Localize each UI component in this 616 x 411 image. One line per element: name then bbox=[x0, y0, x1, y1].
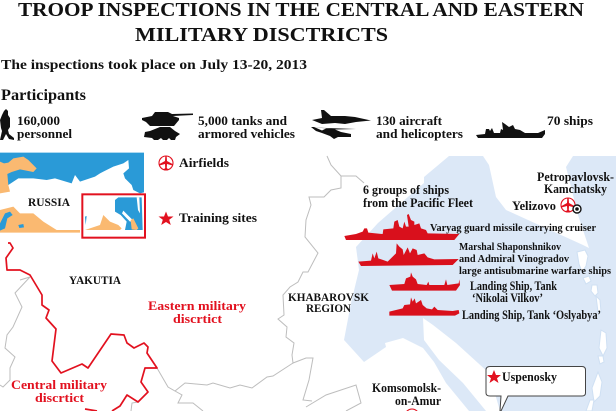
text: ships: 70 ships bbox=[547, 114, 593, 128]
label: Komsomolsk-on-Amur bbox=[372, 381, 441, 408]
text: aircraft: and helicopters bbox=[376, 127, 463, 141]
label: eastern military district bbox=[148, 299, 247, 326]
ship: Shaposhnikov and Vinogradov bbox=[358, 243, 459, 266]
label: Khabarovsk region: KHABAROVSK bbox=[288, 292, 369, 304]
ship: Nikolai Vilkov bbox=[389, 272, 460, 291]
icon: city marker bbox=[573, 205, 581, 213]
text: Shaposhnikov and Vinogradov: and Admiral Vinogradov bbox=[459, 253, 569, 265]
red district boundary bbox=[6, 243, 157, 411]
text: callout label: Uspenosky bbox=[502, 369, 557, 384]
label: Khabarovsk region: REGION bbox=[306, 303, 352, 315]
label: central military district: discrtict bbox=[35, 391, 85, 405]
text: aircraft bbox=[376, 114, 463, 141]
text: aircraft: 130 aircraft bbox=[376, 114, 443, 128]
label: Khabarovsk region bbox=[288, 292, 369, 315]
ship: Oslyabya bbox=[389, 297, 459, 316]
text: six groups of ships bbox=[363, 183, 474, 210]
text: six groups of ships: from the Pacific Fleet bbox=[363, 196, 474, 210]
text: tanks: 5,000 tanks and bbox=[198, 114, 287, 128]
label: central military district bbox=[11, 378, 108, 405]
label: Yakutia: YAKUTIA bbox=[69, 275, 122, 287]
subtitle: The inspections took place on July 13-20, 2013 bbox=[1, 58, 307, 73]
ship: Varyag bbox=[344, 214, 459, 240]
label: eastern military district: Eastern military bbox=[148, 299, 247, 313]
icon: tank and armored vehicle bbox=[142, 112, 193, 140]
inset: red frame bbox=[82, 194, 145, 238]
icon: black ship bbox=[476, 122, 545, 138]
legend text: airfields: Airfields bbox=[179, 156, 229, 170]
text: tanks bbox=[198, 114, 295, 141]
icon: aircraft and helicopter bbox=[311, 110, 371, 139]
text: personnel: personnel bbox=[17, 127, 73, 141]
map: sea of Okhotsk and Pacific bbox=[344, 156, 616, 411]
label: central military district: Central military bbox=[11, 378, 108, 392]
text: personnel: 160,000 bbox=[17, 114, 60, 128]
text: Varyag: Varyag guard missile carrying cruiser bbox=[430, 222, 596, 234]
legend icon: airfield bbox=[159, 156, 173, 170]
label: Petropavlovsk-Kamchatsky: Petropavlovsk- bbox=[537, 170, 614, 184]
label: Komsomolsk-on-Amur: on-Amur bbox=[395, 394, 441, 408]
text: six groups of ships: 6 groups of ships bbox=[363, 183, 449, 197]
map: grey region borders bbox=[0, 156, 364, 411]
callout: Uspenosky bbox=[486, 366, 586, 411]
inset: Russia locator map bbox=[0, 153, 145, 238]
text: personnel bbox=[17, 114, 73, 141]
label: Yelizovo: Yelizovo bbox=[512, 199, 556, 213]
icon: Komsomolsk airfield bbox=[405, 409, 419, 411]
title: MILITARY DISCTRICTS bbox=[135, 24, 388, 46]
text: tanks: armored vehicles bbox=[198, 127, 295, 141]
text: Shaposhnikov and Vinogradov: Marshal Shaponshnikov bbox=[459, 241, 561, 253]
icon: callout star bbox=[487, 370, 501, 383]
heading: participants: Participants bbox=[1, 87, 86, 104]
label: Petropavlovsk-Kamchatsky: Kamchatsky bbox=[544, 182, 608, 196]
text: Shaposhnikov and Vinogradov: large antisubmarine warfare ships bbox=[459, 265, 612, 277]
icon: Yelizovo airfield bbox=[561, 198, 575, 212]
text: Shaposhnikov and Vinogradov bbox=[459, 241, 612, 277]
text: Nikolai Vilkov: ‘Nikolai Vilkov’ bbox=[472, 291, 543, 305]
label: Russia: RUSSIA bbox=[28, 197, 71, 209]
icon: soldier bbox=[0, 109, 14, 140]
text: Nikolai Vilkov bbox=[470, 279, 557, 305]
text: Nikolai Vilkov: Landing Ship, Tank bbox=[470, 279, 557, 293]
legend text: training sites: Training sites bbox=[179, 211, 257, 225]
label: Petropavlovsk-Kamchatsky bbox=[537, 170, 614, 196]
label: eastern military district: discrtict bbox=[173, 312, 223, 326]
legend icon: star bbox=[158, 212, 174, 225]
label: Komsomolsk-on-Amur: Komsomolsk- bbox=[372, 381, 441, 395]
title bbox=[18, 0, 584, 46]
